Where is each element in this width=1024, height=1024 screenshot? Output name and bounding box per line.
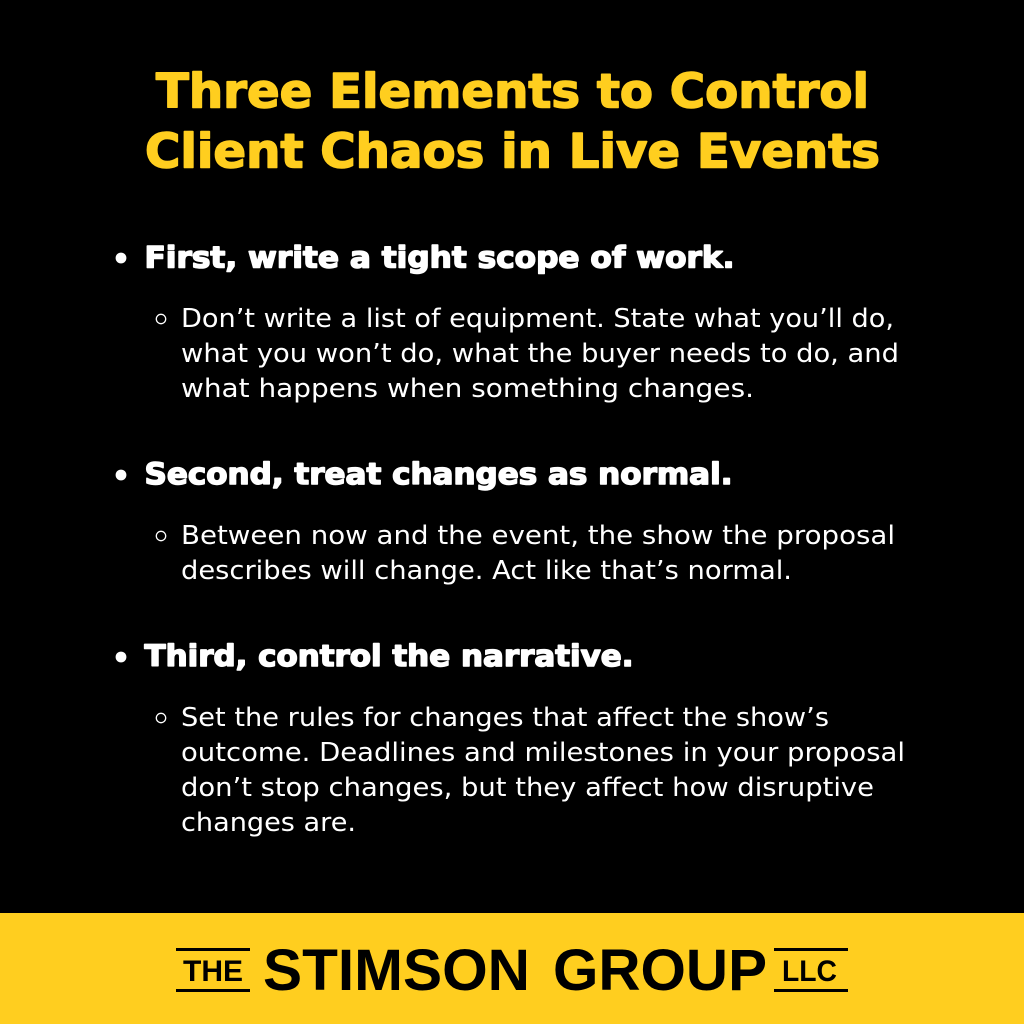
text block: second: Between now and the event, the show the proposal [181,521,895,551]
text block: second: describes will change. Act like that’s normal. [181,556,792,586]
logo: The Stimson Group LLC [176,938,848,1003]
footer band [0,913,1024,1024]
title: Client Chaos in Live Events [145,124,880,180]
text block: third: outcome. Deadlines and milestones in your proposal [181,738,905,768]
text block: third: Set the rules for changes that affect the show’s [181,703,829,733]
heading: third: Third, control the narrative. [144,639,634,673]
logo: The Stimson Group LLC: STIMSON [263,938,530,1003]
heading: first: First, write a tight scope of work. [144,240,734,274]
sub-bullet: second [156,531,166,541]
logo: The Stimson Group LLC: THE [183,955,243,988]
text block: first: what you won’t do, what the buyer needs to do, and [181,339,899,369]
text block: second [181,521,895,586]
section: first element [116,240,899,404]
text block: third [181,703,905,838]
logo: The Stimson Group LLC: LLC [782,955,837,988]
text block: third: don’t stop changes, but they affect how disruptive [181,773,874,803]
sub-bullet: third [156,713,166,723]
title: Three Elements to Control [156,64,869,120]
bullet: third [116,652,126,662]
heading: second: Second, treat changes as normal. [144,457,732,491]
bullet: second [116,470,126,480]
section: second element [116,457,895,586]
title [145,64,880,180]
logo: The Stimson Group LLC: GROUP [553,938,767,1003]
text block: first [181,304,899,404]
bullet: first [116,253,126,263]
text block: first: Don’t write a list of equipment. State what you’ll do, [181,304,894,334]
text block: third: changes are. [181,808,356,838]
section: third element [116,639,905,838]
text block: first: what happens when something changes. [181,374,754,404]
sub-bullet: first [156,314,166,324]
